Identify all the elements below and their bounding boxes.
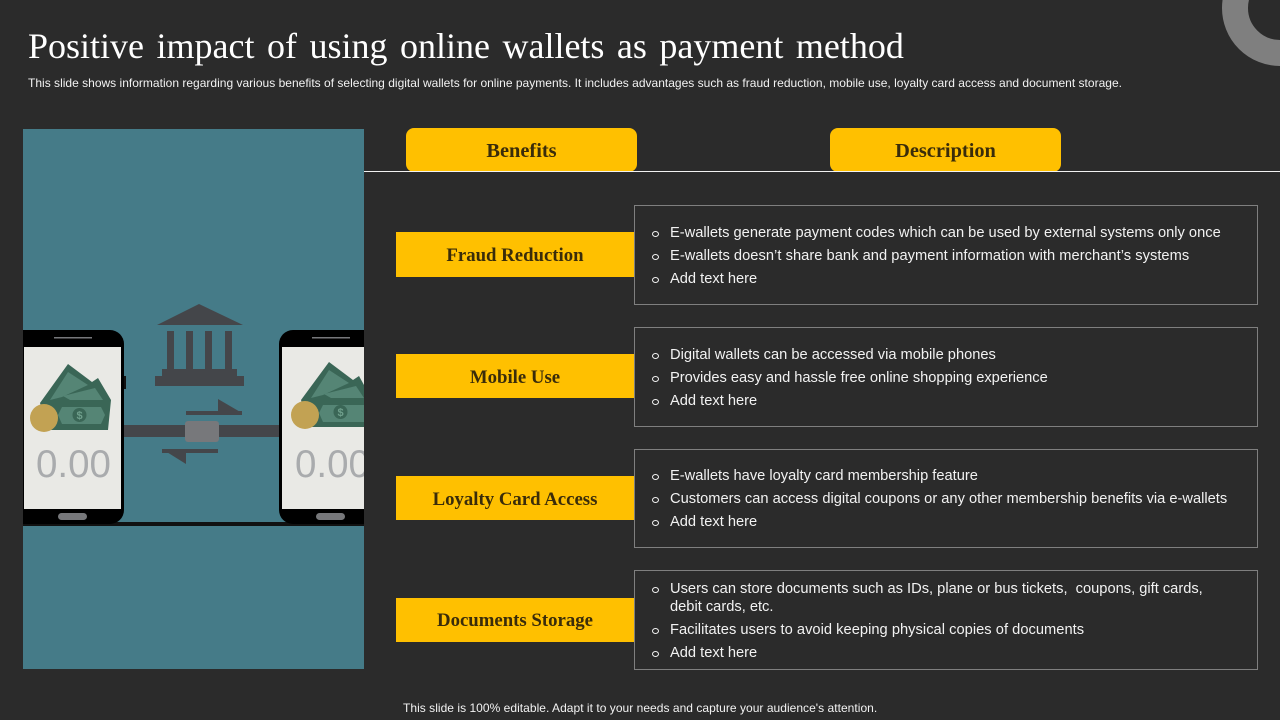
column heading: Benefits [406, 128, 637, 172]
icon: banknotes: $ [76, 410, 83, 422]
connector bar [124, 421, 279, 442]
bullet list: Documents Storage: Users can store documents such as IDs, plane or bus tickets, coupons, gift cards, [670, 581, 1203, 597]
icon: transfer arrows [162, 399, 242, 464]
balance: 0.00 [36, 443, 111, 486]
bullet list: Mobile Use: Add text here [670, 393, 757, 409]
label: Mobile Use [396, 354, 634, 398]
description box: Mobile Use [634, 327, 1258, 427]
footer note: This slide is 100% editable. Adapt it to your needs and capture your audience's attention. [403, 701, 877, 715]
icon: bank [155, 304, 244, 386]
description box: Loyalty Card Access [634, 449, 1258, 548]
subtitle: This slide shows information regarding various benefits of selecting digital wallets for online payments. It includes advantages such as fraud reduction, mobile use, loyalty card access and document storage. [28, 76, 1122, 90]
label: Loyalty Card Access [396, 476, 634, 520]
bullet list: Documents Storage: Facilitates users to avoid keeping physical copies of documents [670, 622, 1084, 638]
bullet list: Mobile Use [652, 347, 1048, 409]
title: Positive impact of using online wallets as payment method [28, 26, 904, 66]
label: Documents Storage [396, 598, 634, 642]
illustration panel: wallets and bank [23, 129, 364, 669]
bullet list: Loyalty Card Access [652, 468, 1227, 530]
column heading: Description [830, 128, 1061, 172]
icon: banknotes: $ [337, 407, 344, 419]
header rule [364, 171, 1280, 172]
icon: coin [30, 404, 58, 432]
icon: banknotes [40, 364, 111, 430]
ground line [23, 522, 364, 526]
left phone [23, 330, 126, 524]
description box: Documents Storage [634, 570, 1258, 670]
label: Fraud Reduction [396, 232, 634, 277]
bullet list: Documents Storage: Add text here [670, 645, 757, 661]
bullet list: Loyalty Card Access: E-wallets have loyalty card membership feature [670, 468, 978, 484]
column heading: Benefits: Benefits [486, 140, 557, 162]
icon: banknotes [301, 362, 364, 427]
bullet list: Loyalty Card Access: Add text here [670, 514, 757, 530]
label: Fraud Reduction: Fraud Reduction [446, 244, 584, 266]
label: Loyalty Card Access: Loyalty Card Access [433, 488, 597, 510]
description box: Fraud Reduction [634, 205, 1258, 305]
bullet list: Fraud Reduction: E-wallets doesn’t share bank and payment information with merchant’s systems [670, 248, 1189, 264]
right phone [279, 330, 370, 524]
bullet list: Loyalty Card Access: Customers can access digital coupons or any other membership benefits via e-wallets [670, 491, 1227, 507]
bullet list: Mobile Use: Provides easy and hassle free online shopping experience [670, 370, 1048, 386]
decorative ring: top right [1222, 0, 1280, 66]
bullet list: Documents Storage [652, 581, 1203, 661]
bullet list: Fraud Reduction [652, 225, 1221, 287]
icon: coin [291, 401, 319, 429]
bullet list: Documents Storage: debit cards, etc. [670, 599, 773, 615]
label: Documents Storage: Documents Storage [437, 610, 593, 631]
bullet list: Mobile Use: Digital wallets can be accessed via mobile phones [670, 347, 996, 363]
label: Mobile Use: Mobile Use [470, 366, 560, 388]
bullet list: Fraud Reduction: Add text here [670, 271, 757, 287]
column heading: Description: Description [895, 140, 996, 162]
bullet list: Fraud Reduction: E-wallets generate payment codes which can be used by external systems only once [670, 225, 1221, 241]
